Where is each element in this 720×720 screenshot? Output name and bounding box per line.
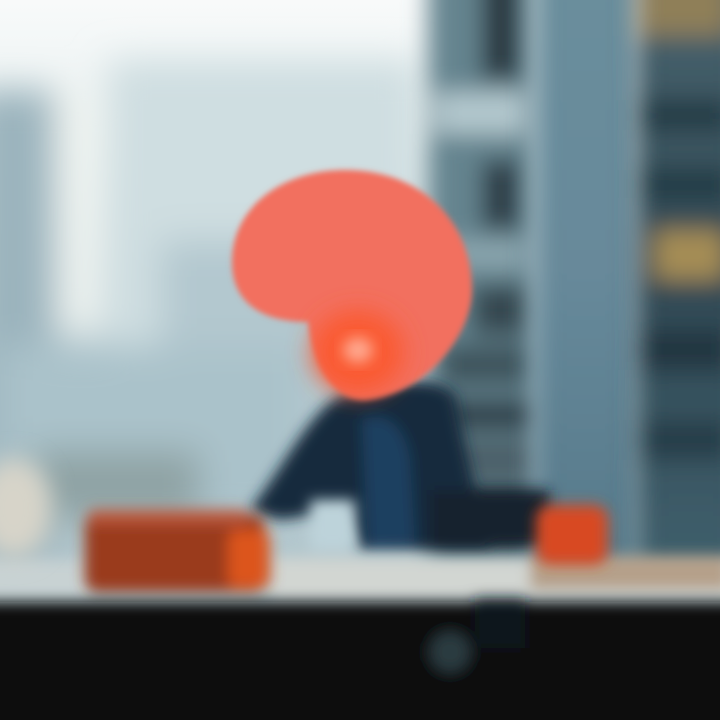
object: orange cup: [536, 505, 608, 565]
object: red-orange box: [85, 510, 270, 592]
figure: dark navy body: [250, 381, 550, 550]
foreground: black desk edge: [0, 598, 720, 720]
background: distant pale buildings: [0, 60, 430, 560]
building: dark tower with lit windows: [636, 0, 720, 570]
object: white blurred sphere at left: [0, 458, 52, 558]
figure: coral red head blob: [232, 170, 472, 400]
building: striped dark tower: [428, 0, 540, 570]
glow: bright centre: [343, 337, 373, 363]
building: blue-grey glass tower: [534, 0, 638, 570]
desk surface: [0, 500, 720, 600]
glow: orange core: [312, 310, 404, 394]
